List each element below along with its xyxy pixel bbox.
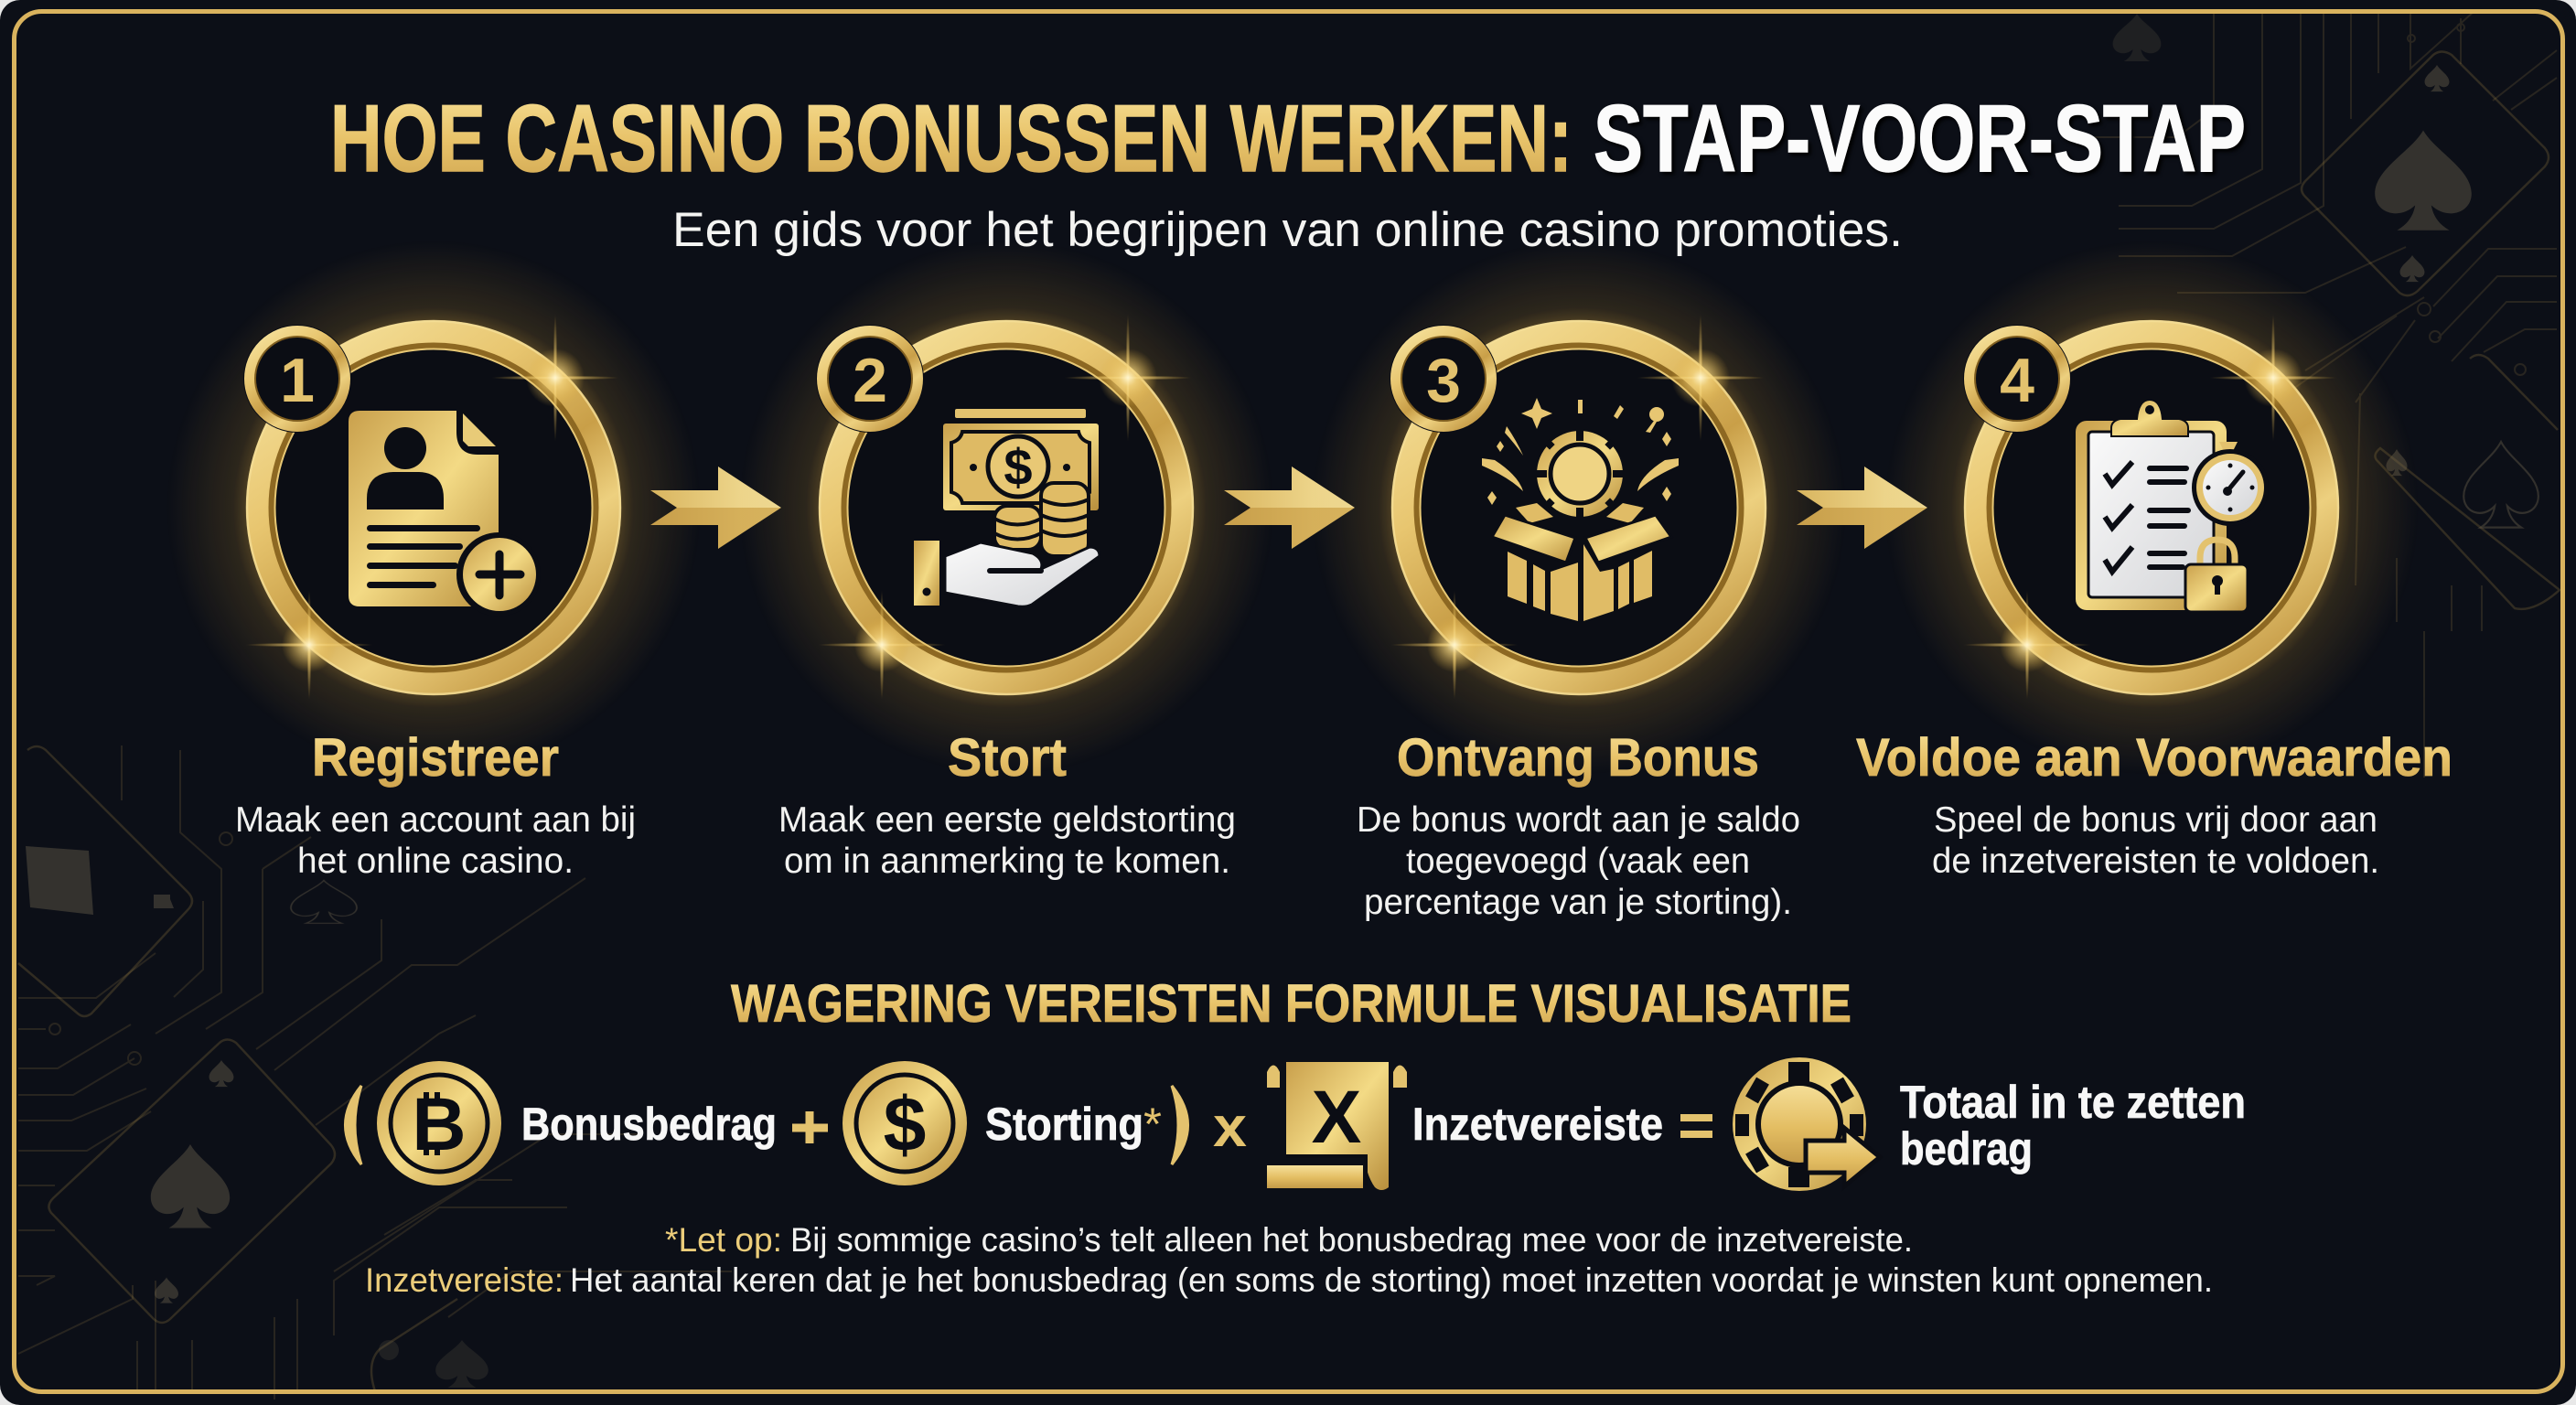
step 4: voldoe aan voorwaarden xyxy=(1856,241,2453,881)
gold ring 3 xyxy=(1312,241,1846,775)
title xyxy=(330,86,2246,192)
icon: checklist with stopwatch and lock xyxy=(2076,400,2269,612)
gold ring 2 xyxy=(739,241,1273,775)
number badge 1: 1 xyxy=(280,346,315,415)
step 4 description: Speel de bonus vrij door aan xyxy=(1934,800,2377,840)
step 3 description: percentage van je storting). xyxy=(1364,883,1792,922)
icon: dollar coin xyxy=(843,1061,967,1185)
icon: dollar coin: $ xyxy=(884,1081,926,1167)
step 2 description: Maak een eerste geldstorting xyxy=(778,800,1236,840)
icon: chip with arrow xyxy=(1733,1057,1880,1191)
label: storting: Storting xyxy=(985,1099,1143,1150)
step 1 description: het online casino. xyxy=(297,842,574,881)
asterisk: * xyxy=(1143,1099,1162,1150)
step 3 description xyxy=(1357,800,1800,922)
step 2 heading: Stort xyxy=(948,728,1067,788)
step 2 description xyxy=(778,800,1236,881)
label: bonusbedrag: Bonusbedrag xyxy=(521,1099,777,1150)
number badge 1 xyxy=(243,325,351,433)
step 3 heading: Ontvang Bonus xyxy=(1397,728,1759,788)
number badge 3 xyxy=(1390,325,1497,433)
number badge 4 xyxy=(1963,325,2071,433)
number badge 2 xyxy=(816,325,924,433)
step 3: ontvang bonus xyxy=(1312,241,1846,922)
step 1: registreer xyxy=(166,241,701,881)
icon: money and hand xyxy=(914,409,1100,606)
step 2: stort xyxy=(739,241,1273,881)
icon: scroll with x xyxy=(1267,1062,1407,1190)
step 2 description: om in aanmerking te komen. xyxy=(784,842,1230,881)
footnote line 2: Het aantal keren dat je het bonusbedrag (en soms de storting) moet inzetten voordat je winsten kunt opnemen. xyxy=(570,1261,2213,1299)
arrow 3 xyxy=(1797,467,1927,549)
icon: bitcoin coin xyxy=(377,1061,501,1185)
label: totaal in te zetten bedrag: Totaal in te zetten xyxy=(1900,1077,2246,1128)
icon: scroll with x: X xyxy=(1312,1076,1361,1159)
opening bracket xyxy=(346,1086,361,1164)
icon: money and hand: $ xyxy=(1004,438,1033,496)
footnotes xyxy=(365,1221,2213,1299)
step 1 description xyxy=(235,800,636,881)
wagering formula xyxy=(346,1057,2246,1191)
icon: bitcoin coin: B xyxy=(412,1083,467,1166)
step 4 heading: Voldoe aan Voorwaarden xyxy=(1856,728,2453,788)
gold ring 4 xyxy=(1884,241,2419,775)
number badge 3: 3 xyxy=(1426,346,1461,415)
number badge 2: 2 xyxy=(853,346,887,415)
step 3 description: De bonus wordt aan je saldo xyxy=(1357,800,1800,840)
footnote line 2: Inzetvereiste: xyxy=(365,1261,564,1299)
closing bracket xyxy=(1172,1086,1187,1164)
subtitle: Een gids voor het begrijpen van online casino promoties. xyxy=(672,203,1903,257)
label: totaal in te zetten bedrag xyxy=(1900,1077,2246,1174)
icon: registration document xyxy=(349,411,541,617)
label: totaal in te zetten bedrag: bedrag xyxy=(1900,1123,2033,1174)
plus sign xyxy=(792,1111,828,1143)
step 3 description: toegevoegd (vaak een xyxy=(1406,842,1750,881)
step 1 description: Maak een account aan bij xyxy=(235,800,636,840)
footnote line 1: *Let op: xyxy=(665,1221,782,1259)
arrow 1 xyxy=(650,467,781,549)
step 1 heading: Registreer xyxy=(312,728,559,788)
formula heading: WAGERING VEREISTEN FORMULE VISUALISATIE xyxy=(731,974,1852,1034)
step 4 description: de inzetvereisten te voldoen. xyxy=(1932,842,2379,881)
equals sign xyxy=(1680,1118,1712,1134)
number badge 4: 4 xyxy=(2000,346,2034,415)
title white part: STAP-VOOR-STAP xyxy=(1594,86,2246,192)
step 4 description xyxy=(1932,800,2379,881)
title gold part: HOE CASINO BONUSSEN WERKEN: xyxy=(330,86,1572,192)
multiply sign: x xyxy=(1213,1096,1248,1159)
icon: gift box with chip xyxy=(1482,398,1679,621)
arrow 2 xyxy=(1224,467,1355,549)
label: inzetvereiste: Inzetvereiste xyxy=(1412,1099,1663,1150)
footnote line 1: Bij sommige casino’s telt alleen het bonusbedrag mee voor de inzetvereiste. xyxy=(790,1221,1913,1259)
gold ring 1 xyxy=(166,241,701,775)
